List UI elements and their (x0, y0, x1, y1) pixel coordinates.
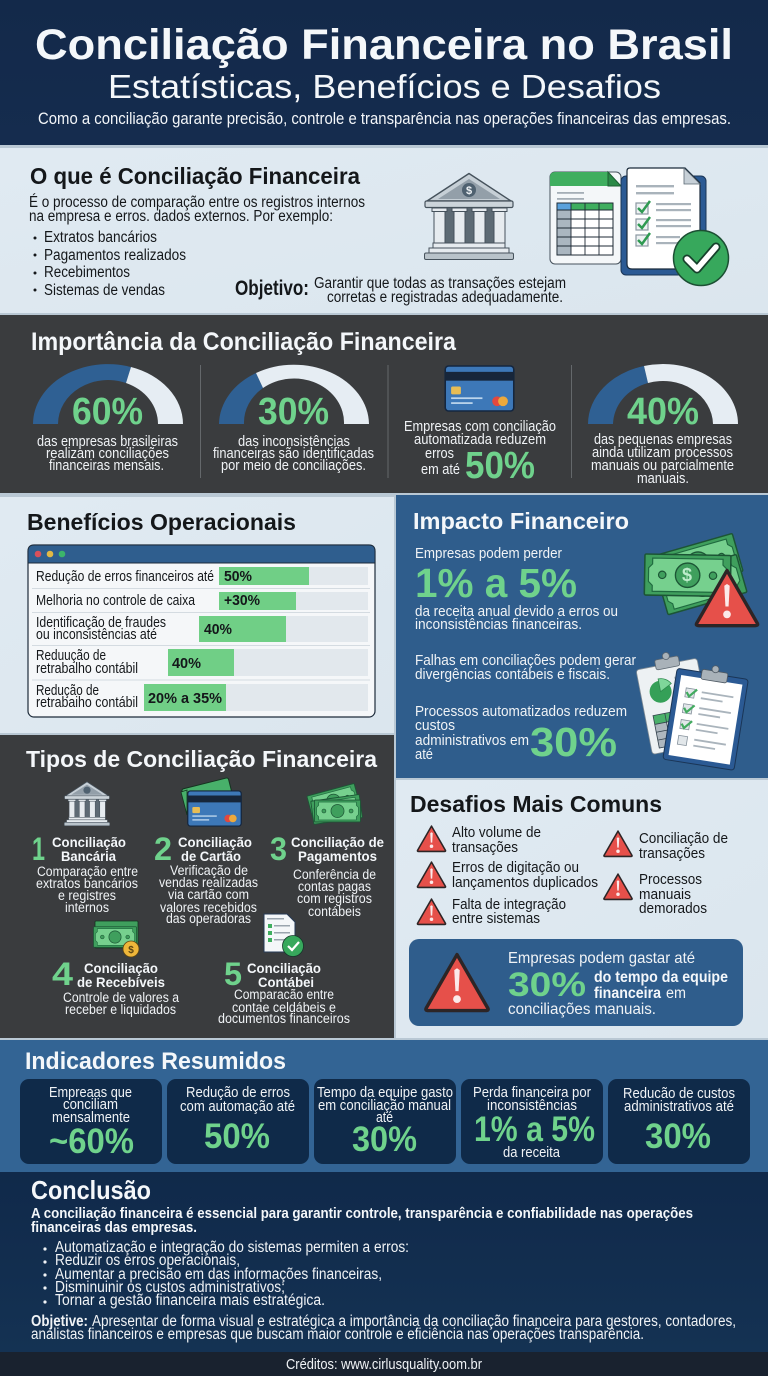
text: falhas (415, 652, 636, 683)
type 1: bancária: internos (65, 900, 109, 915)
text: falhas: divergências contábeis e fiscais. (415, 666, 610, 683)
row: fraudes: ou inconsistências até (36, 627, 157, 643)
type 2: cartão: via cartão com (168, 887, 249, 902)
stat: 30%: 30% (258, 391, 329, 433)
icon: bank (424, 174, 514, 260)
type 1: bancária: Conciliação (52, 834, 126, 850)
conclusion list: Aumentar a precisão em das informações financeiras, (55, 1266, 382, 1283)
conclusion list: Automatização e integração do sistemas permiten a erros: (55, 1239, 409, 1256)
type 1: bancária: Bancária (61, 848, 116, 864)
row: redução 20% a 35%: 20% a 35% (148, 691, 222, 707)
row: erros: Redução de erros financeiros até (36, 569, 214, 585)
type 4: recebíveis: Conciliação (84, 960, 158, 976)
challenge: alto volume: Alto volume de (452, 824, 541, 841)
challenge: processos manuais: demorados (639, 900, 707, 917)
callout: tempo gasto: conciliações manuais. (508, 1001, 656, 1018)
challenge: processos manuais: Processos (639, 871, 702, 888)
type 4: recebíveis: de Recebíveis (77, 974, 165, 990)
type 3: pagamentos: contas pagas (298, 879, 371, 894)
heading: tipos: Tipos de Conciliação Financeira (26, 746, 377, 772)
type 5: contábil: Conciliação (247, 960, 321, 976)
challenge: erros de digitação: Erros de digitação ou (452, 859, 579, 876)
stat: 60%: realizam conciliações (46, 446, 169, 462)
panel: benefícios operacionais (0, 497, 394, 733)
conclusion list: Tornar a gestão financeira mais estratégica. (55, 1292, 325, 1309)
card: empresas que conciliam (20, 1079, 162, 1164)
type 2: cartão: vendas realizadas (159, 875, 258, 890)
subtitle: Estatísticas, Benefícios e Desafios (108, 68, 661, 105)
panel: desafios (396, 780, 768, 1038)
callout: tempo gasto: Empresas podem gastar até (508, 950, 695, 967)
row: retrabalho: Reduução de (36, 648, 106, 664)
stat: 40%: das pequenas empresas (594, 432, 732, 448)
stat: 50% with card: automatizada reduzem (414, 432, 546, 448)
row: erros: 50% (224, 569, 252, 585)
definition text: É o processo de comparação entre os registros internos (29, 194, 365, 211)
footer: credits: Créditos: www.cirlusquality.oom.br (286, 1356, 482, 1373)
card: perda financeira: da receita (503, 1144, 561, 1161)
type 5: contábil: Contábei (258, 974, 314, 990)
row: redução 20% a 35%: retrabaiho contábil (36, 695, 138, 711)
card: tempo da equipe: até (376, 1109, 393, 1126)
type 1: bancária: e registres (58, 888, 116, 903)
card: empresas que conciliam: mensalmente (52, 1109, 130, 1126)
row: retrabalho (36, 648, 368, 677)
type 1: bancária: extratos bancários (36, 876, 138, 891)
card: redução de custos: administrativos até (624, 1098, 734, 1115)
text: perda de receita: 1% a 5% (415, 560, 577, 606)
panel: impacto financeiro (396, 495, 768, 778)
type 5: contábil: contae celdábeis e (232, 1000, 336, 1015)
type 3: pagamentos (270, 783, 384, 919)
card: tempo da equipe: em conciliação manual (318, 1097, 451, 1114)
type 5: contábil: 5 (224, 956, 242, 992)
stat: 30%: das inconsistências (238, 434, 350, 450)
type 1: bancária: Comparação entre (37, 864, 138, 879)
card: redução de erros: 50% (204, 1117, 270, 1156)
type 2: cartão: de Cartão (181, 848, 241, 864)
stat: 30%: por meio de conciliações. (221, 458, 366, 474)
text: perda de receita: da receita anual devido a erros ou (415, 603, 618, 620)
panel: tipos de conciliação (0, 735, 394, 1038)
definition text: na empresa e erros. dados externos. Por exemplo: (29, 208, 333, 225)
panel: o que é conciliação (0, 148, 768, 313)
examples list: Extratos bancários (44, 229, 157, 246)
conclusion list: Reduzir os erros operacionais, (55, 1252, 240, 1269)
card: tempo da equipe: 30% (352, 1120, 417, 1159)
stat: 40%: ainda utilizam processos (592, 445, 733, 461)
type 4: recebíveis: 4 (52, 956, 73, 992)
row: caixa (36, 592, 368, 610)
icon: spreadsheet (550, 172, 621, 264)
row: caixa: +30% (224, 593, 260, 609)
heading: desafios: Desafios Mais Comuns (410, 791, 662, 817)
card: redução de erros: com automação até (180, 1098, 295, 1115)
type 5: contábil: documentos financeiros (218, 1011, 350, 1026)
stat: 40% (588, 364, 738, 487)
definition text (29, 194, 365, 225)
stat: 50% with card (404, 366, 556, 487)
icon: money and warning (644, 533, 758, 626)
type 2: cartão: Conciliação (178, 834, 252, 850)
stat: 60%: 60% (72, 391, 143, 433)
stat: 40%: manuais ou parcialmente (591, 458, 734, 474)
icon: money and warning: $ (682, 565, 692, 585)
row: fraudes (36, 615, 368, 643)
challenge: processos manuais (604, 871, 707, 917)
panel: indicadores (0, 1040, 768, 1172)
callout: tempo gasto (409, 939, 743, 1026)
examples list: Recebimentos (44, 264, 130, 281)
text: perda de receita (415, 545, 618, 633)
stat: 50% with card: Empresas com conciliação (404, 419, 556, 435)
objective: Objetivo: (235, 277, 309, 300)
type 2: cartão: das operadoras (166, 911, 251, 926)
type 2: cartão: 2 (154, 831, 172, 867)
text: perda de receita: inconsistências financeiras. (415, 616, 582, 633)
type 4: recebíveis (52, 921, 179, 1017)
card: tempo da equipe: Tempo da equipe gasto (317, 1084, 453, 1101)
heading: benefícios: Benefícios Operacionais (27, 509, 296, 535)
row: caixa: Melhoria no controle de caixa (36, 593, 196, 609)
row: retrabalho: 40% (172, 656, 201, 672)
objective (235, 275, 566, 306)
type 3: pagamentos: Conciliação de (291, 834, 384, 850)
type 5: contábil (218, 914, 350, 1026)
card: redução de erros: Redução de erros (186, 1084, 290, 1101)
heading: o que é: O que é Conciliação Financeira (30, 163, 360, 189)
stat: 50% with card: em até (421, 462, 460, 478)
stat: 60%: das empresas brasileiras (37, 434, 178, 450)
card: redução de custos: Reducão de custos (623, 1085, 735, 1102)
challenge: alto volume (417, 824, 541, 856)
type 2: cartão: Verificação de (170, 863, 248, 878)
text: falhas: Falhas em conciliações podem gerar (415, 652, 636, 669)
examples list: Sistemas de vendas (44, 282, 165, 299)
panel: conclusão (0, 1172, 768, 1352)
row: redução 20% a 35% (36, 683, 368, 711)
card: perda financeira (461, 1079, 603, 1164)
challenge: alto volume: transações (452, 839, 518, 856)
challenge: conciliação de transações: transações (639, 845, 705, 862)
window chart (28, 545, 375, 717)
conclusion list: Disminuinir os custos administrativos; (55, 1279, 285, 1296)
type 4: recebíveis: receber e liquidados (65, 1002, 176, 1017)
challenge: conciliação de transações: Conciliação de (639, 830, 728, 847)
objective text (31, 1313, 736, 1343)
text: processos (415, 703, 627, 765)
callout: tempo gasto: em (666, 985, 686, 1002)
objective text: analistas financeiros e empresas que buscam maior controle e eficiência nas operações transparência. (31, 1326, 644, 1343)
card: redução de custos (608, 1079, 750, 1164)
objective: Garantir que todas as transações estejam (314, 275, 566, 292)
type 3: pagamentos: Pagamentos (298, 848, 377, 864)
summary text: A conciliação financeira é essencial para garantir controle, transparência e confiabilidade nas operações (31, 1205, 693, 1222)
objective text: Objetive: (31, 1313, 88, 1330)
icon: bank: $ (466, 185, 472, 197)
challenge: falta de integração (417, 896, 566, 927)
card: redução de erros (167, 1079, 309, 1164)
card: empresas que conciliam: ~60% (49, 1122, 134, 1161)
heading: importância: Importância da Conciliação Financeira (31, 328, 457, 356)
text: perda de receita: Empresas podem perder (415, 545, 562, 562)
text: processos: custos (415, 717, 455, 734)
challenge: falta de integração: Falta de integração (452, 896, 566, 913)
type 3: pagamentos: 3 (270, 831, 287, 867)
icon: checklist document (621, 168, 706, 275)
card: redução de custos: 30% (645, 1117, 711, 1156)
text: processos: Processos automatizados reduzem (415, 703, 627, 720)
examples list (34, 229, 186, 299)
stat: 50% with card: 50% (465, 445, 535, 487)
type 2: cartão (154, 778, 258, 926)
objective: corretas e registradas adequadamente. (327, 289, 563, 306)
row: redução 20% a 35%: Redução de (36, 683, 99, 699)
callout: tempo gasto: do tempo da equipe (594, 969, 728, 986)
callout: tempo gasto: financeira (594, 985, 661, 1002)
stat: 60%: financeiras mensais. (49, 458, 164, 474)
conclusion list (43, 1239, 409, 1309)
row: fraudes: 40% (204, 622, 232, 638)
examples list: Pagamentos realizados (44, 247, 186, 264)
summary text (31, 1205, 693, 1236)
card: empresas que conciliam: Empreaas que (49, 1084, 132, 1101)
challenge: falta de integração: entre sistemas (452, 910, 540, 927)
type 3: pagamentos: contábeis (308, 904, 361, 919)
heading: indicadores: Indicadores Resumidos (25, 1048, 286, 1075)
panel: header (0, 0, 768, 145)
stat: 40%: manuais. (637, 471, 689, 487)
title: Conciliação Financeira no Brasil (35, 21, 733, 69)
challenge: conciliação de transações (604, 830, 728, 862)
type 4: recebíveis: $ (128, 945, 134, 956)
type 3: pagamentos: Conferência de (293, 867, 376, 882)
text: processos: até (415, 746, 433, 763)
card: tempo da equipe (314, 1079, 456, 1164)
stat: 30% (213, 365, 374, 474)
heading: conclusão: Conclusão (31, 1175, 151, 1205)
summary text: financeiras das empresas. (31, 1219, 197, 1236)
heading: impacto: Impacto Financeiro (413, 508, 629, 534)
type 1: bancária: 1 (32, 831, 45, 867)
type 3: pagamentos: com registros (297, 891, 372, 906)
type 4: recebíveis: Controle de valores a (63, 990, 179, 1005)
challenge: erros de digitação (417, 859, 598, 891)
stat: 40%: 40% (627, 391, 699, 433)
stat: 60% (33, 364, 183, 474)
type 5: contábil: Comparacão entre (234, 987, 334, 1002)
type 2: cartão: valores recebidos (160, 900, 257, 915)
row: erros (36, 567, 368, 585)
card: empresas que conciliam: conciliam (63, 1096, 118, 1113)
panel: importância (0, 315, 768, 493)
row: retrabalho: retrabalho contábil (36, 661, 138, 677)
text: processos: 30% (530, 719, 617, 765)
challenge: processos manuais: manuais (639, 886, 691, 903)
stat: 30%: financeiras são identificadas (213, 446, 374, 462)
icon: clipboards (634, 647, 750, 770)
stat: 50% with card: erros (425, 446, 454, 462)
icon: green check badge (674, 230, 728, 286)
text: processos: administrativos em (415, 732, 529, 749)
card: perda financeira: inconsistências (487, 1097, 577, 1114)
card: perda financeira: Perda financeira por (473, 1084, 591, 1101)
card: perda financeira: 1% a 5% (474, 1110, 595, 1149)
challenge: erros de digitação: lançamentos duplicados (452, 874, 598, 891)
row: fraudes: Identificação de fraudes (36, 615, 166, 631)
type 1: bancária (32, 782, 138, 915)
footer: credits (0, 1352, 768, 1376)
callout: tempo gasto: 30% (508, 966, 586, 1004)
